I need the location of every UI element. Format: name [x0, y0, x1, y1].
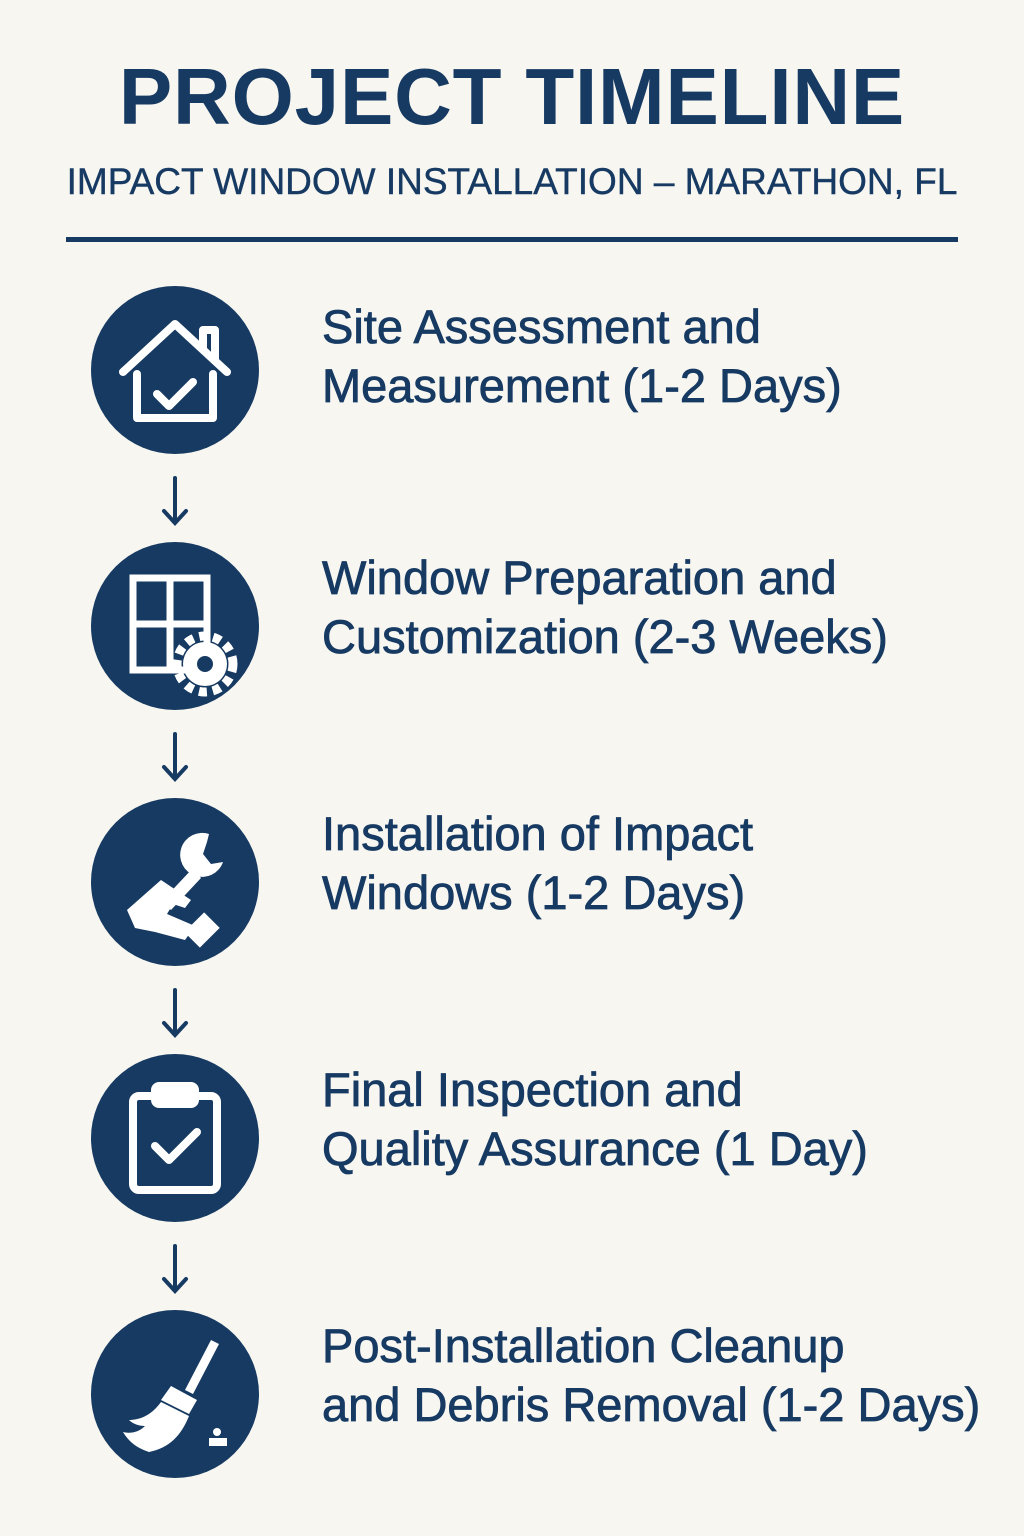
step 3 text: Installation of Impact: [322, 807, 753, 860]
arrow 1: [162, 476, 188, 526]
step 4 text: Final Inspection and: [322, 1063, 743, 1116]
step 1 text: [322, 300, 842, 412]
step 2 text: [322, 551, 888, 664]
step 4 text: [322, 1063, 868, 1176]
icon: clipboard check: [91, 1054, 259, 1222]
step 1 text: Measurement (1-2 Days): [322, 359, 842, 412]
step 5 text: [322, 1319, 980, 1432]
step 2 text: Customization (2-3 Weeks): [322, 610, 888, 663]
step 1 text: Site Assessment and: [322, 300, 761, 353]
step 2 text: Window Preparation and: [322, 551, 837, 604]
arrow 4: [162, 1244, 188, 1294]
icon: window gear: [91, 542, 259, 710]
step 3 text: Windows (1-2 Days): [322, 866, 745, 919]
icon: hand wrench: [91, 798, 259, 966]
icon: house check: [91, 286, 259, 454]
step 4 text: Quality Assurance (1 Day): [322, 1122, 868, 1175]
step 3 text: [322, 807, 754, 920]
arrow 2: [162, 732, 188, 782]
icon: broom: [91, 1310, 259, 1478]
step 5 text: and Debris Removal (1-2 Days): [322, 1378, 980, 1431]
subtitle: IMPACT WINDOW INSTALLATION – MARATHON, FL: [67, 161, 957, 202]
title: PROJECT TIMELINE: [119, 52, 905, 141]
arrow 3: [162, 988, 188, 1038]
step 5 text: Post-Installation Cleanup: [322, 1319, 845, 1372]
